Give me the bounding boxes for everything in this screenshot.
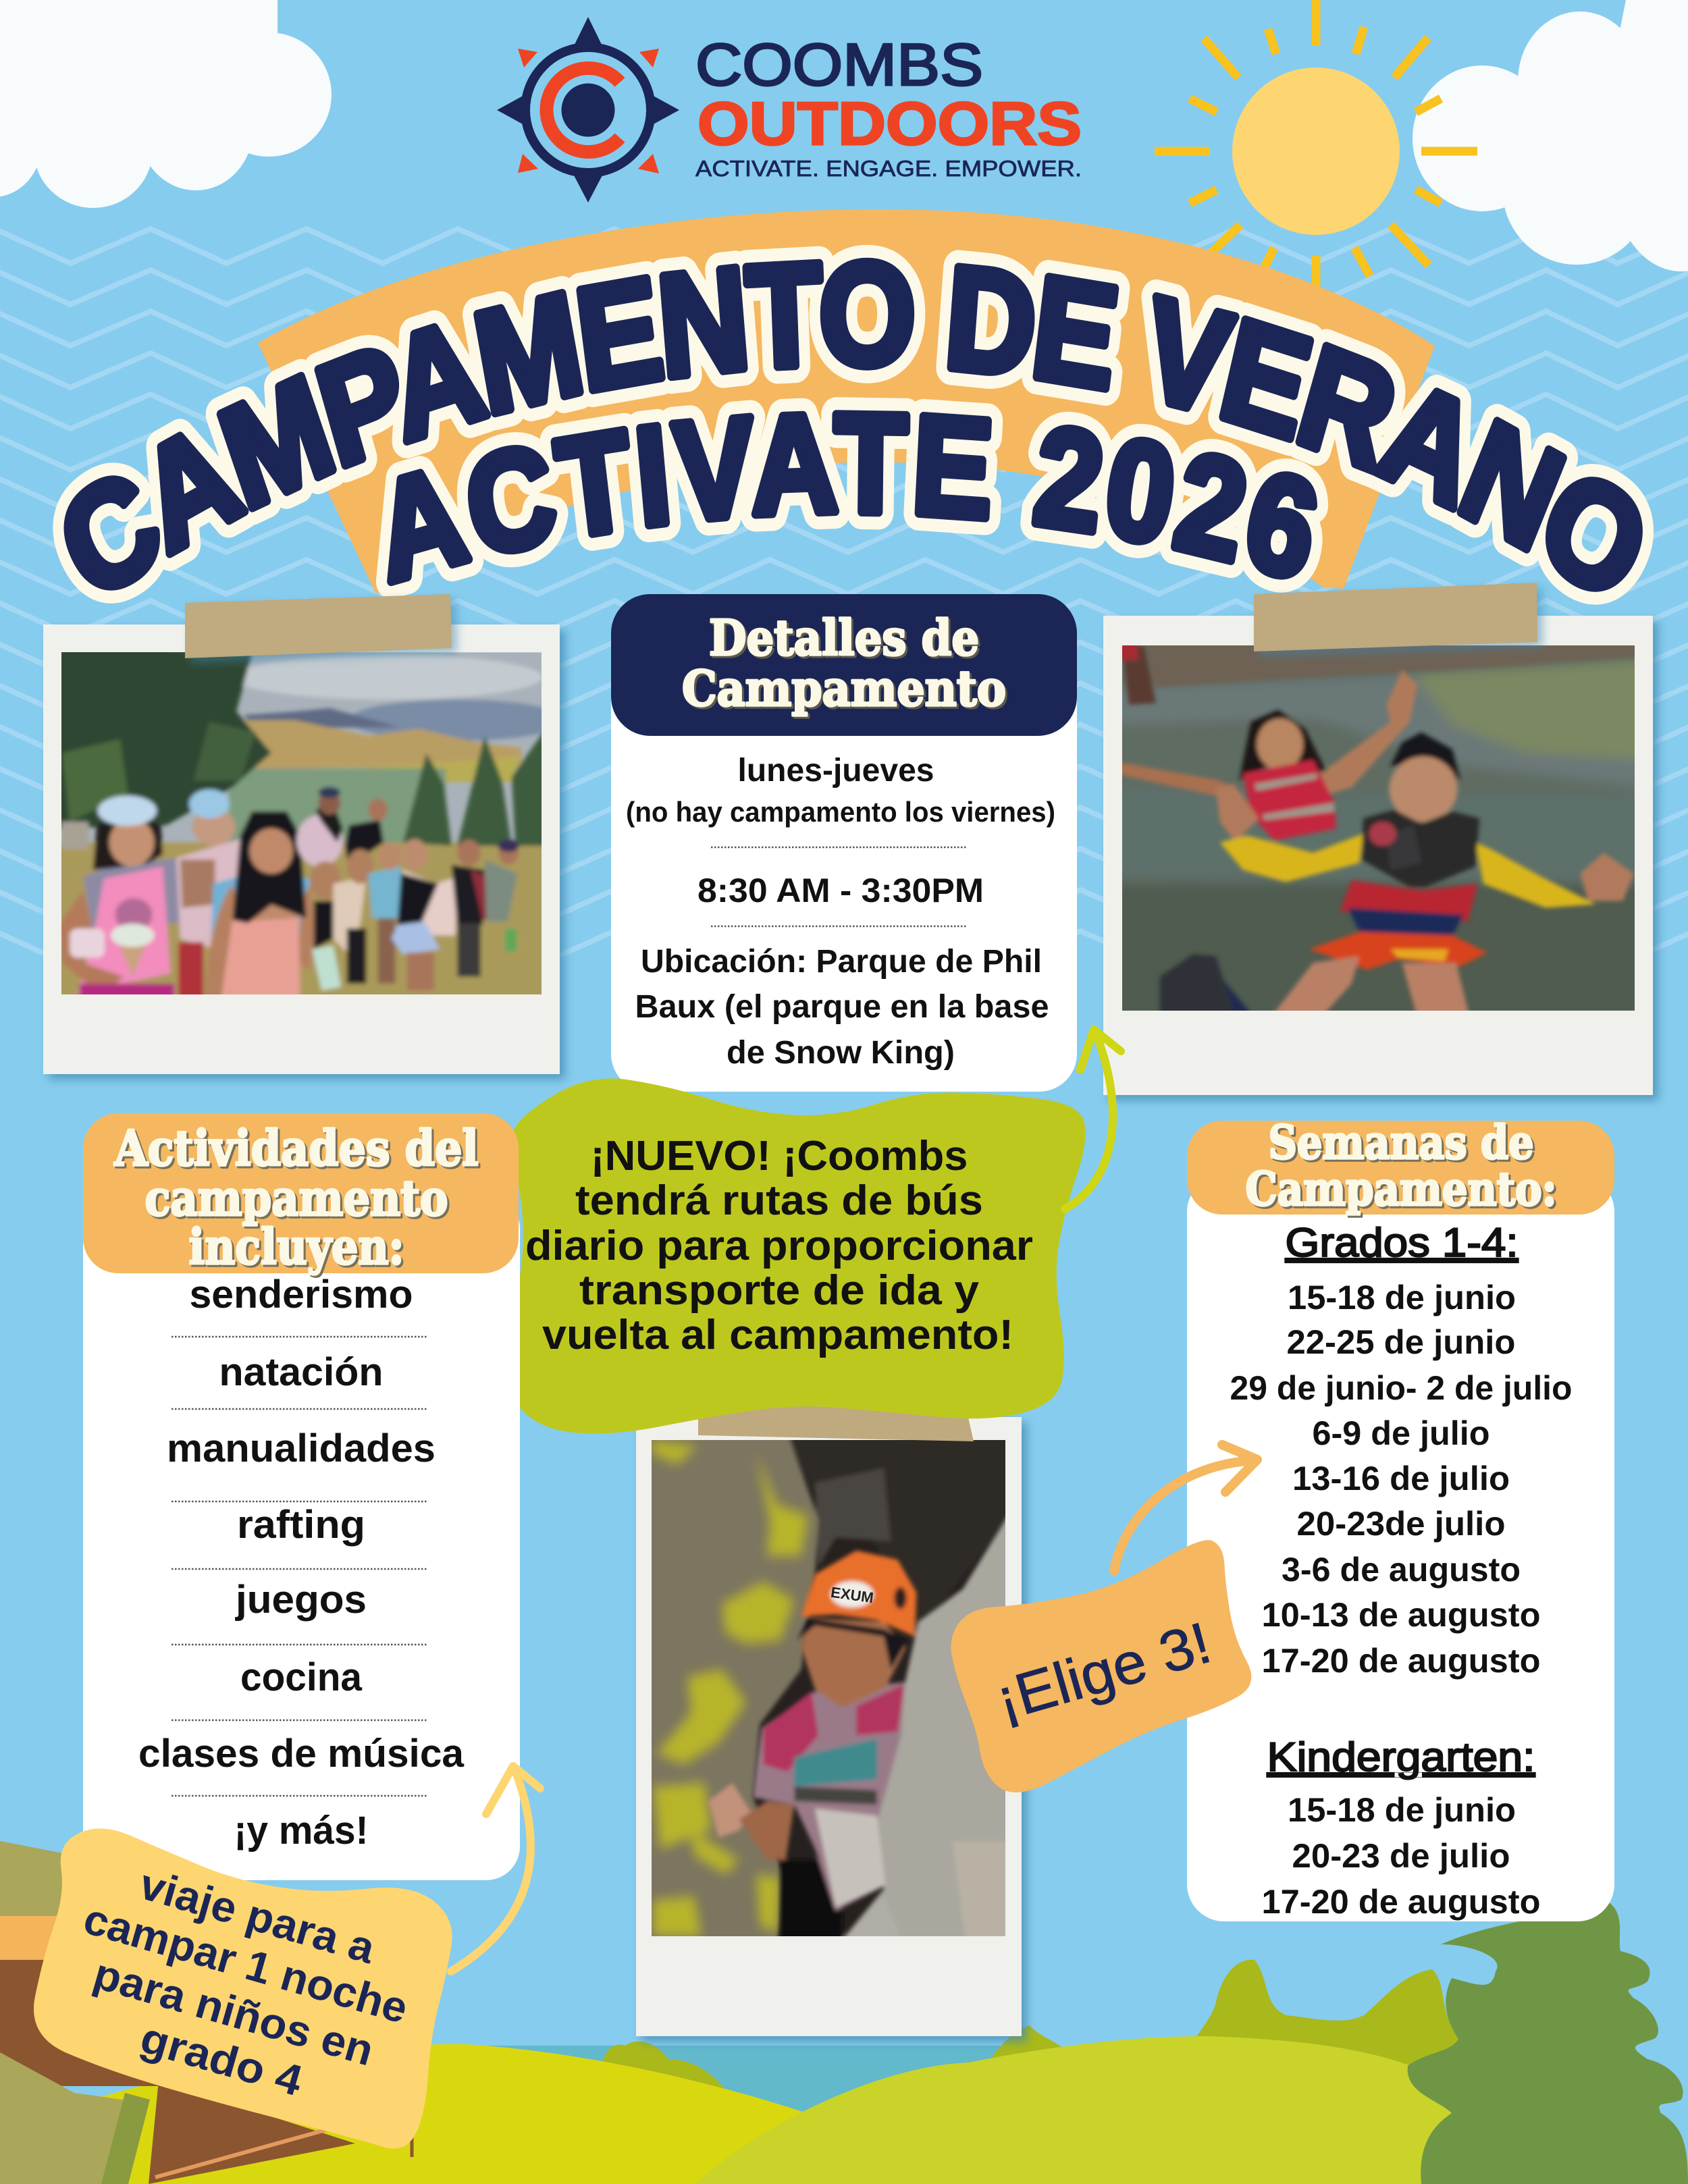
logo wordmark: COOMBS	[695, 31, 983, 98]
activity list: cocina	[240, 1655, 363, 1699]
arrow: overnight trip to activities	[451, 1766, 540, 1971]
grades 1-4 weeks: 10-13 de augusto	[1261, 1596, 1541, 1634]
activity list: clases de música	[138, 1732, 465, 1776]
right hill	[695, 2036, 1634, 2184]
title line 1: CAMPAMENTO DE VERANO	[63, 258, 1643, 592]
orange arch banner	[258, 209, 1435, 594]
activity list: juegos	[235, 1578, 367, 1622]
heading: Actividades del campamento incluyen: incluyen:	[189, 1218, 404, 1275]
heading: Actividades del campamento incluyen: campamento	[144, 1169, 448, 1227]
polaroid 2: swimming	[1103, 616, 1658, 1100]
kindergarten weeks	[1261, 1734, 1541, 1921]
grades 1-4 weeks: 20-23de julio	[1296, 1505, 1506, 1543]
bus route text: transporte de ida y	[579, 1267, 980, 1314]
heading: Actividades del campamento incluyen: Actividades del	[114, 1119, 478, 1177]
logo wordmark	[695, 31, 1082, 181]
tent	[0, 1841, 412, 2184]
grades 1-4 weeks: 17-20 de augusto	[1261, 1642, 1541, 1680]
schedule text: Baux (el parque en la base	[635, 989, 1049, 1025]
schedule text: (no hay campamento los viernes)	[626, 796, 1055, 828]
activity list: natación	[219, 1350, 384, 1394]
polaroid 1: group hike	[43, 624, 566, 1080]
arrow: Elige 3 to weeks	[1114, 1445, 1257, 1571]
kindergarten weeks: 20-23 de julio	[1292, 1837, 1510, 1875]
grades 1-4 weeks: 3-6 de augusto	[1282, 1551, 1521, 1589]
bus route text: vuelta al campamento!	[542, 1312, 1013, 1358]
sun	[1155, 0, 1477, 294]
bushes	[600, 1960, 1499, 2184]
photo: child with helmet between rocks	[639, 1431, 1015, 1948]
tape on polaroid 3	[698, 1406, 974, 1441]
kid 3	[209, 874, 313, 936]
cloud top left	[0, 0, 332, 208]
kid 2	[176, 839, 242, 947]
grades 1-4 weeks: Grados 1-4:	[1286, 1220, 1518, 1265]
green callout: new bus routes	[506, 1078, 1086, 1433]
kid 1	[83, 858, 182, 936]
helmet sticker label: EXUM	[830, 1584, 874, 1606]
bus route text: diario para proporcionar	[525, 1223, 1033, 1269]
heading: Detalles de Campamento: Detalles de	[709, 609, 979, 666]
grades 1-4 weeks: 29 de junio- 2 de julio	[1230, 1369, 1572, 1407]
overnight trip text: para niños en	[88, 1949, 379, 2075]
title line 1: CAMPAMENTO DE VERANO	[53, 244, 1654, 605]
callout: Elige 3: ¡Elige 3!	[989, 1610, 1218, 1733]
landscape: hills, bushes and tree	[0, 1841, 1688, 2184]
logo wordmark: OUTDOORS	[697, 90, 1082, 158]
grades 1-4 weeks: 6-9 de julio	[1313, 1414, 1489, 1452]
overnight trip text: grado 4	[135, 2013, 308, 2106]
bus route text	[525, 1133, 1033, 1358]
activity list: ¡y más!	[234, 1809, 369, 1853]
activity list: senderismo	[189, 1273, 413, 1316]
activity list	[138, 1273, 465, 1853]
title line 2: ACTIVATE 2026	[375, 397, 1329, 597]
schedule text: Ubicación: Parque de Phil	[641, 944, 1042, 980]
title line 2: ACTIVATE 2026	[387, 410, 1317, 586]
grades 1-4 weeks: 22-25 de junio	[1287, 1323, 1515, 1361]
left hill	[0, 2044, 878, 2184]
callout: overnight trip	[34, 1828, 452, 2149]
logo: Coombs Outdoors	[497, 17, 1082, 203]
grades 1-4 weeks: 13-16 de julio	[1292, 1460, 1510, 1497]
heading: Detalles de Campamento: Campamento	[682, 660, 1006, 717]
bus route text: tendrá rutas de bús	[575, 1177, 983, 1224]
heading: Actividades del campamento incluyen	[83, 1113, 519, 1275]
schedule text: de Snow King)	[727, 1035, 955, 1071]
icon: compass	[497, 17, 679, 203]
activity list: rafting	[237, 1503, 365, 1547]
schedule text: 8:30 AM - 3:30PM	[697, 872, 984, 909]
card: activities	[83, 1113, 520, 1880]
callout: Elige 3	[951, 1540, 1251, 1792]
overnight trip text: viaje para a	[134, 1859, 380, 1973]
logo wordmark: ACTIVATE. ENGAGE. EMPOWER.	[695, 156, 1082, 181]
card: camp weeks	[1187, 1116, 1614, 1921]
grades 1-4 weeks	[1230, 1220, 1572, 1680]
card: camp details	[611, 594, 1077, 1092]
arrow: green callout to details card	[1065, 1030, 1121, 1209]
kindergarten weeks: 17-20 de augusto	[1261, 1883, 1541, 1921]
grades 1-4 weeks: 15-18 de junio	[1288, 1279, 1516, 1316]
schedule text	[626, 753, 1055, 1071]
tape on polaroid 1	[185, 594, 457, 663]
cloud top right	[1413, 0, 1688, 271]
small campers	[310, 861, 341, 899]
boy	[1220, 834, 1363, 882]
adults	[296, 815, 343, 867]
photo: campers on a hillside	[61, 652, 542, 994]
heading: Semanas de Campamento: Semanas de	[1268, 1116, 1534, 1170]
polaroid 3: climbing	[636, 1417, 1027, 2042]
heading: Semanas de Campamento: Campamento:	[1245, 1163, 1557, 1217]
overnight trip text: campar 1 noche	[78, 1894, 413, 2033]
kindergarten weeks: 15-18 de junio	[1288, 1791, 1516, 1829]
tape on polaroid 2	[1254, 583, 1543, 656]
sun rays	[1155, 0, 1477, 294]
activity list: manualidades	[167, 1427, 436, 1470]
overnight trip text	[78, 1859, 413, 2106]
title: Campamento de Verano Activate 2026	[53, 244, 1654, 605]
bus route text: ¡NUEVO! ¡Coombs	[590, 1133, 968, 1179]
kindergarten weeks: Kindergarten:	[1267, 1734, 1535, 1780]
girl	[1115, 762, 1243, 801]
heading: Semanas de Campamento	[1187, 1116, 1614, 1217]
schedule text: lunes-jueves	[737, 753, 934, 789]
photo: kids floating in a river	[1111, 639, 1646, 1021]
tree	[1408, 1900, 1688, 2184]
heading: Detalles de Campamento	[611, 594, 1077, 736]
